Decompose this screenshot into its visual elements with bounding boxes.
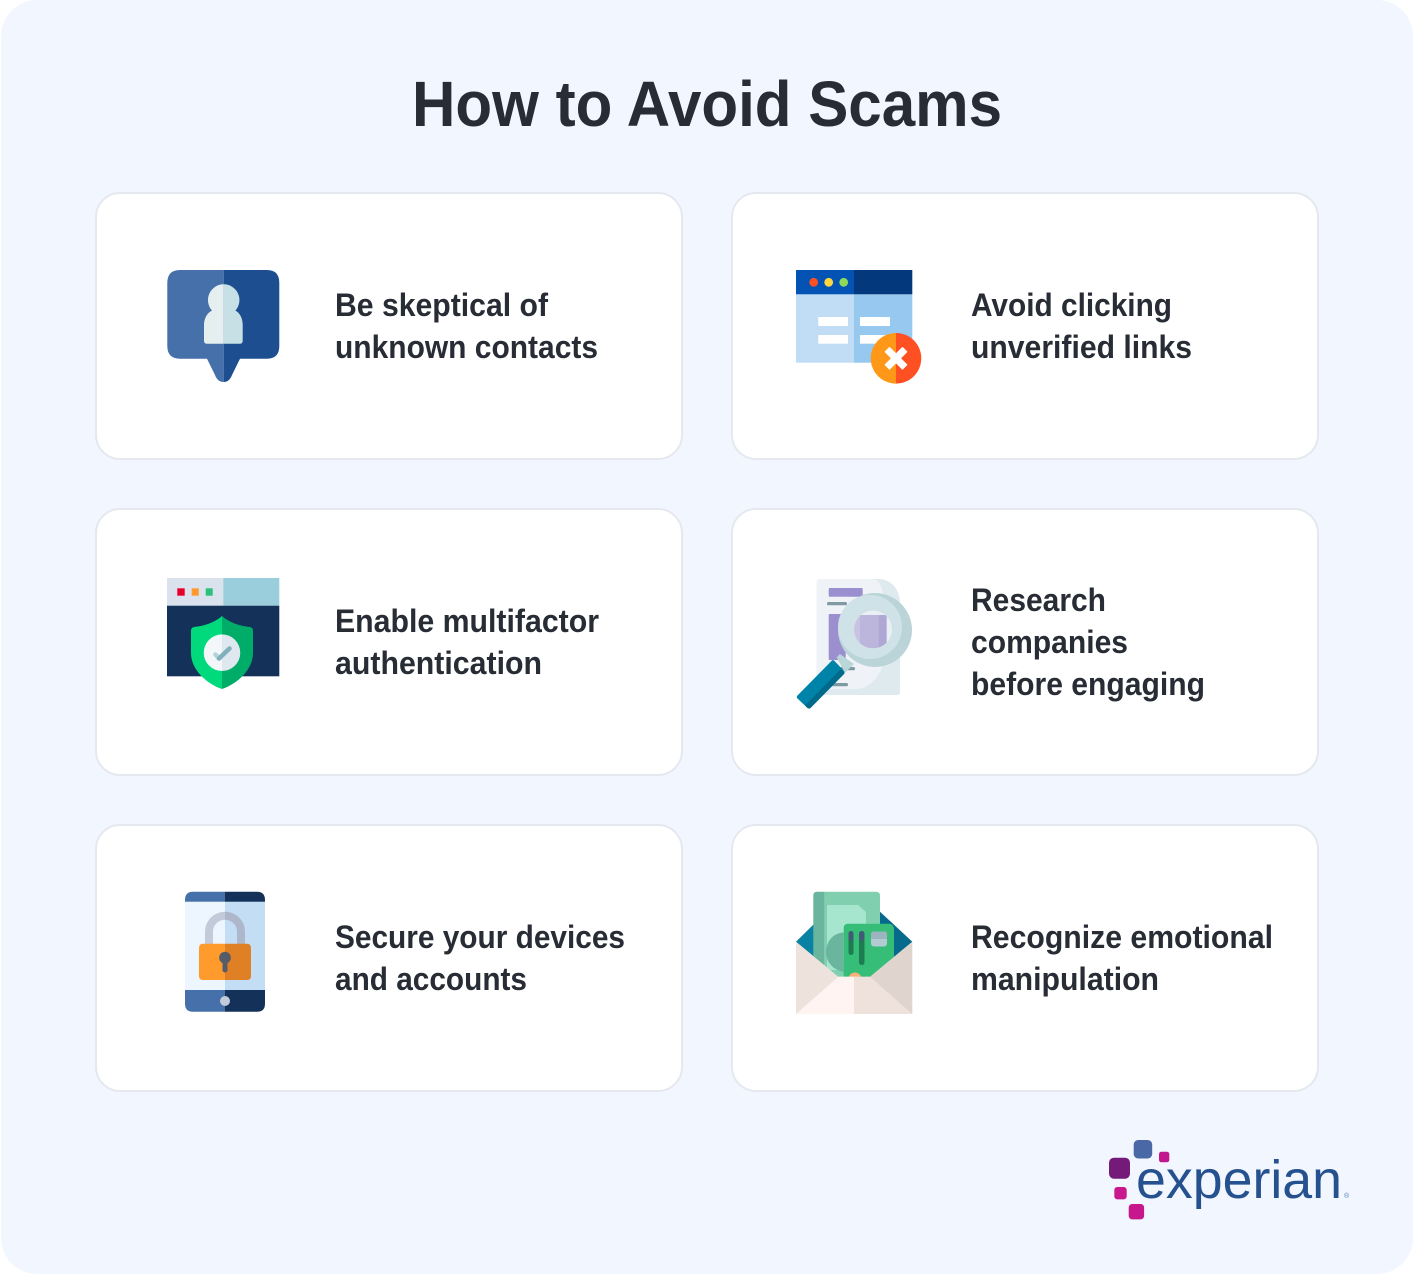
text: be skeptical	[335, 287, 598, 365]
text: secure your devices: and accounts	[335, 961, 527, 997]
panel: be skeptical of unknown contacts	[96, 193, 682, 459]
icon: magnifier over document	[797, 579, 912, 708]
panel: research companies before engaging	[732, 509, 1318, 775]
text: be skeptical: Be skeptical of	[335, 287, 548, 323]
text: research companies: before engaging	[971, 666, 1205, 702]
text: research companies: Research	[971, 582, 1106, 618]
text: research companies: companies	[971, 624, 1128, 660]
text: enable multifactor	[335, 603, 599, 681]
text: avoid clicking: Avoid clicking	[971, 287, 1172, 323]
text: secure your devices: Secure your devices	[335, 919, 625, 955]
text: enable multifactor: Enable multifactor	[335, 603, 599, 639]
logo: experian: experian	[1136, 1150, 1342, 1210]
icon: speech bubble with person	[167, 270, 279, 382]
text: avoid clicking	[971, 287, 1192, 365]
panel: recognize emotional manipulation	[732, 825, 1318, 1091]
icon: browser window with error badge	[796, 270, 921, 384]
text: recognize emotional: Recognize emotional	[971, 919, 1273, 955]
icon: browser window with shield	[167, 578, 279, 689]
text: recognize emotional	[971, 919, 1273, 997]
icon: phone with padlock	[185, 892, 265, 1012]
panel: avoid clicking unverified links	[732, 193, 1318, 459]
panel: secure your devices and accounts	[96, 825, 682, 1091]
text: recognize emotional: manipulation	[971, 961, 1159, 997]
text: research companies	[971, 582, 1205, 702]
text: secure your devices	[335, 919, 625, 997]
icon: envelope with money and card	[796, 892, 912, 1014]
text: enable multifactor: authentication	[335, 645, 542, 681]
title: How to Avoid Scams	[412, 68, 1002, 140]
text: avoid clicking: unverified links	[971, 329, 1192, 365]
logo: experian: ®	[1344, 1192, 1350, 1200]
text: be skeptical: unknown contacts	[335, 329, 598, 365]
panel: enable multifactor authentication	[96, 509, 682, 775]
logo: experian	[1109, 1140, 1350, 1219]
